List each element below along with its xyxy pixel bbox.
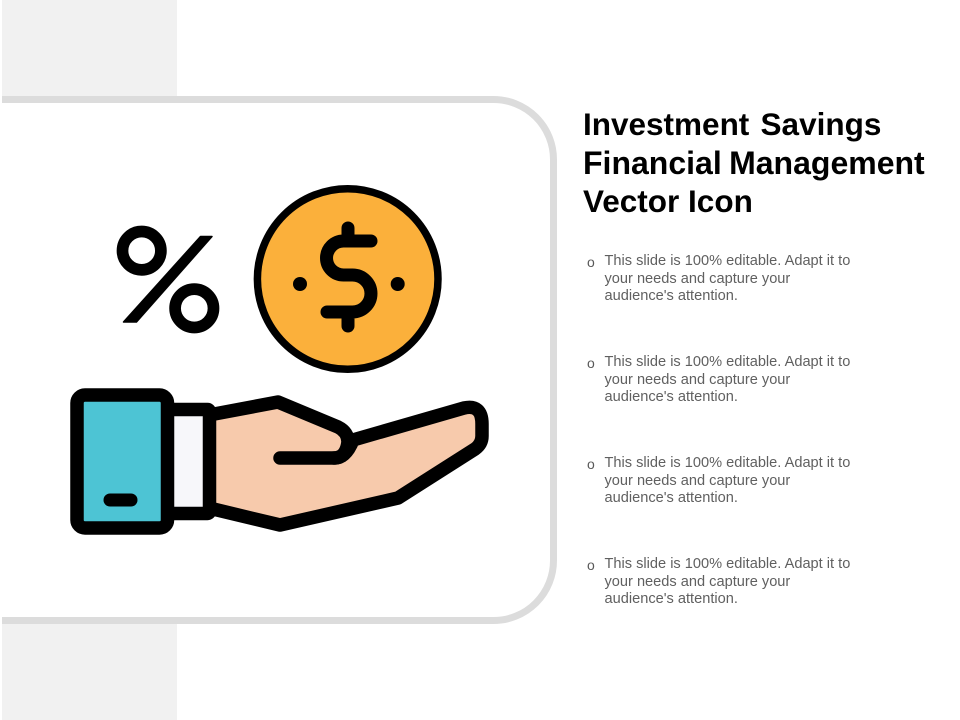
bullet item 4: [587, 556, 850, 607]
grey background band: [2, 0, 177, 720]
bullet item 3: [587, 455, 850, 506]
bullet item 1: your needs and capture your: [604, 271, 790, 287]
thumb line: [280, 444, 349, 458]
hand palm and fingers: [209, 402, 482, 525]
shirt cuff: [167, 410, 210, 514]
bullet item 4: o: [587, 557, 595, 573]
bullet item 1: audience's attention.: [604, 288, 738, 304]
bullet item 1: This slide is 100% editable. Adapt it to: [604, 253, 850, 269]
bullet item 2: audience's attention.: [604, 389, 738, 405]
bullet item 3: This slide is 100% editable. Adapt it to: [604, 455, 850, 471]
icon: dollar coin: [257, 189, 438, 369]
icon: percent sign: [122, 232, 214, 327]
bullet item 1: [587, 253, 850, 304]
title: [583, 106, 925, 219]
bullet item 4: This slide is 100% editable. Adapt it to: [604, 556, 850, 572]
bullet item 3: audience's attention.: [604, 490, 738, 506]
bullet item 4: your needs and capture your: [604, 574, 790, 590]
title: Vector Icon: [583, 183, 753, 219]
bullet item 2: your needs and capture your: [604, 372, 790, 388]
icon: open hand: [77, 395, 482, 528]
bullet item 2: o: [587, 355, 595, 371]
sleeve button: [110, 494, 131, 506]
title: Financial Management: [583, 144, 925, 180]
title: Investment Savings: [583, 106, 881, 142]
bullet item 3: your needs and capture your: [604, 473, 790, 489]
bullet item 4: audience's attention.: [604, 591, 738, 607]
bullet item 3: o: [587, 456, 595, 472]
bullet item 1: o: [587, 254, 595, 270]
jacket sleeve: [77, 395, 168, 528]
bullet item 2: This slide is 100% editable. Adapt it to: [604, 354, 850, 370]
panel: rounded card: [2, 100, 554, 620]
bullet item 2: [587, 354, 850, 405]
